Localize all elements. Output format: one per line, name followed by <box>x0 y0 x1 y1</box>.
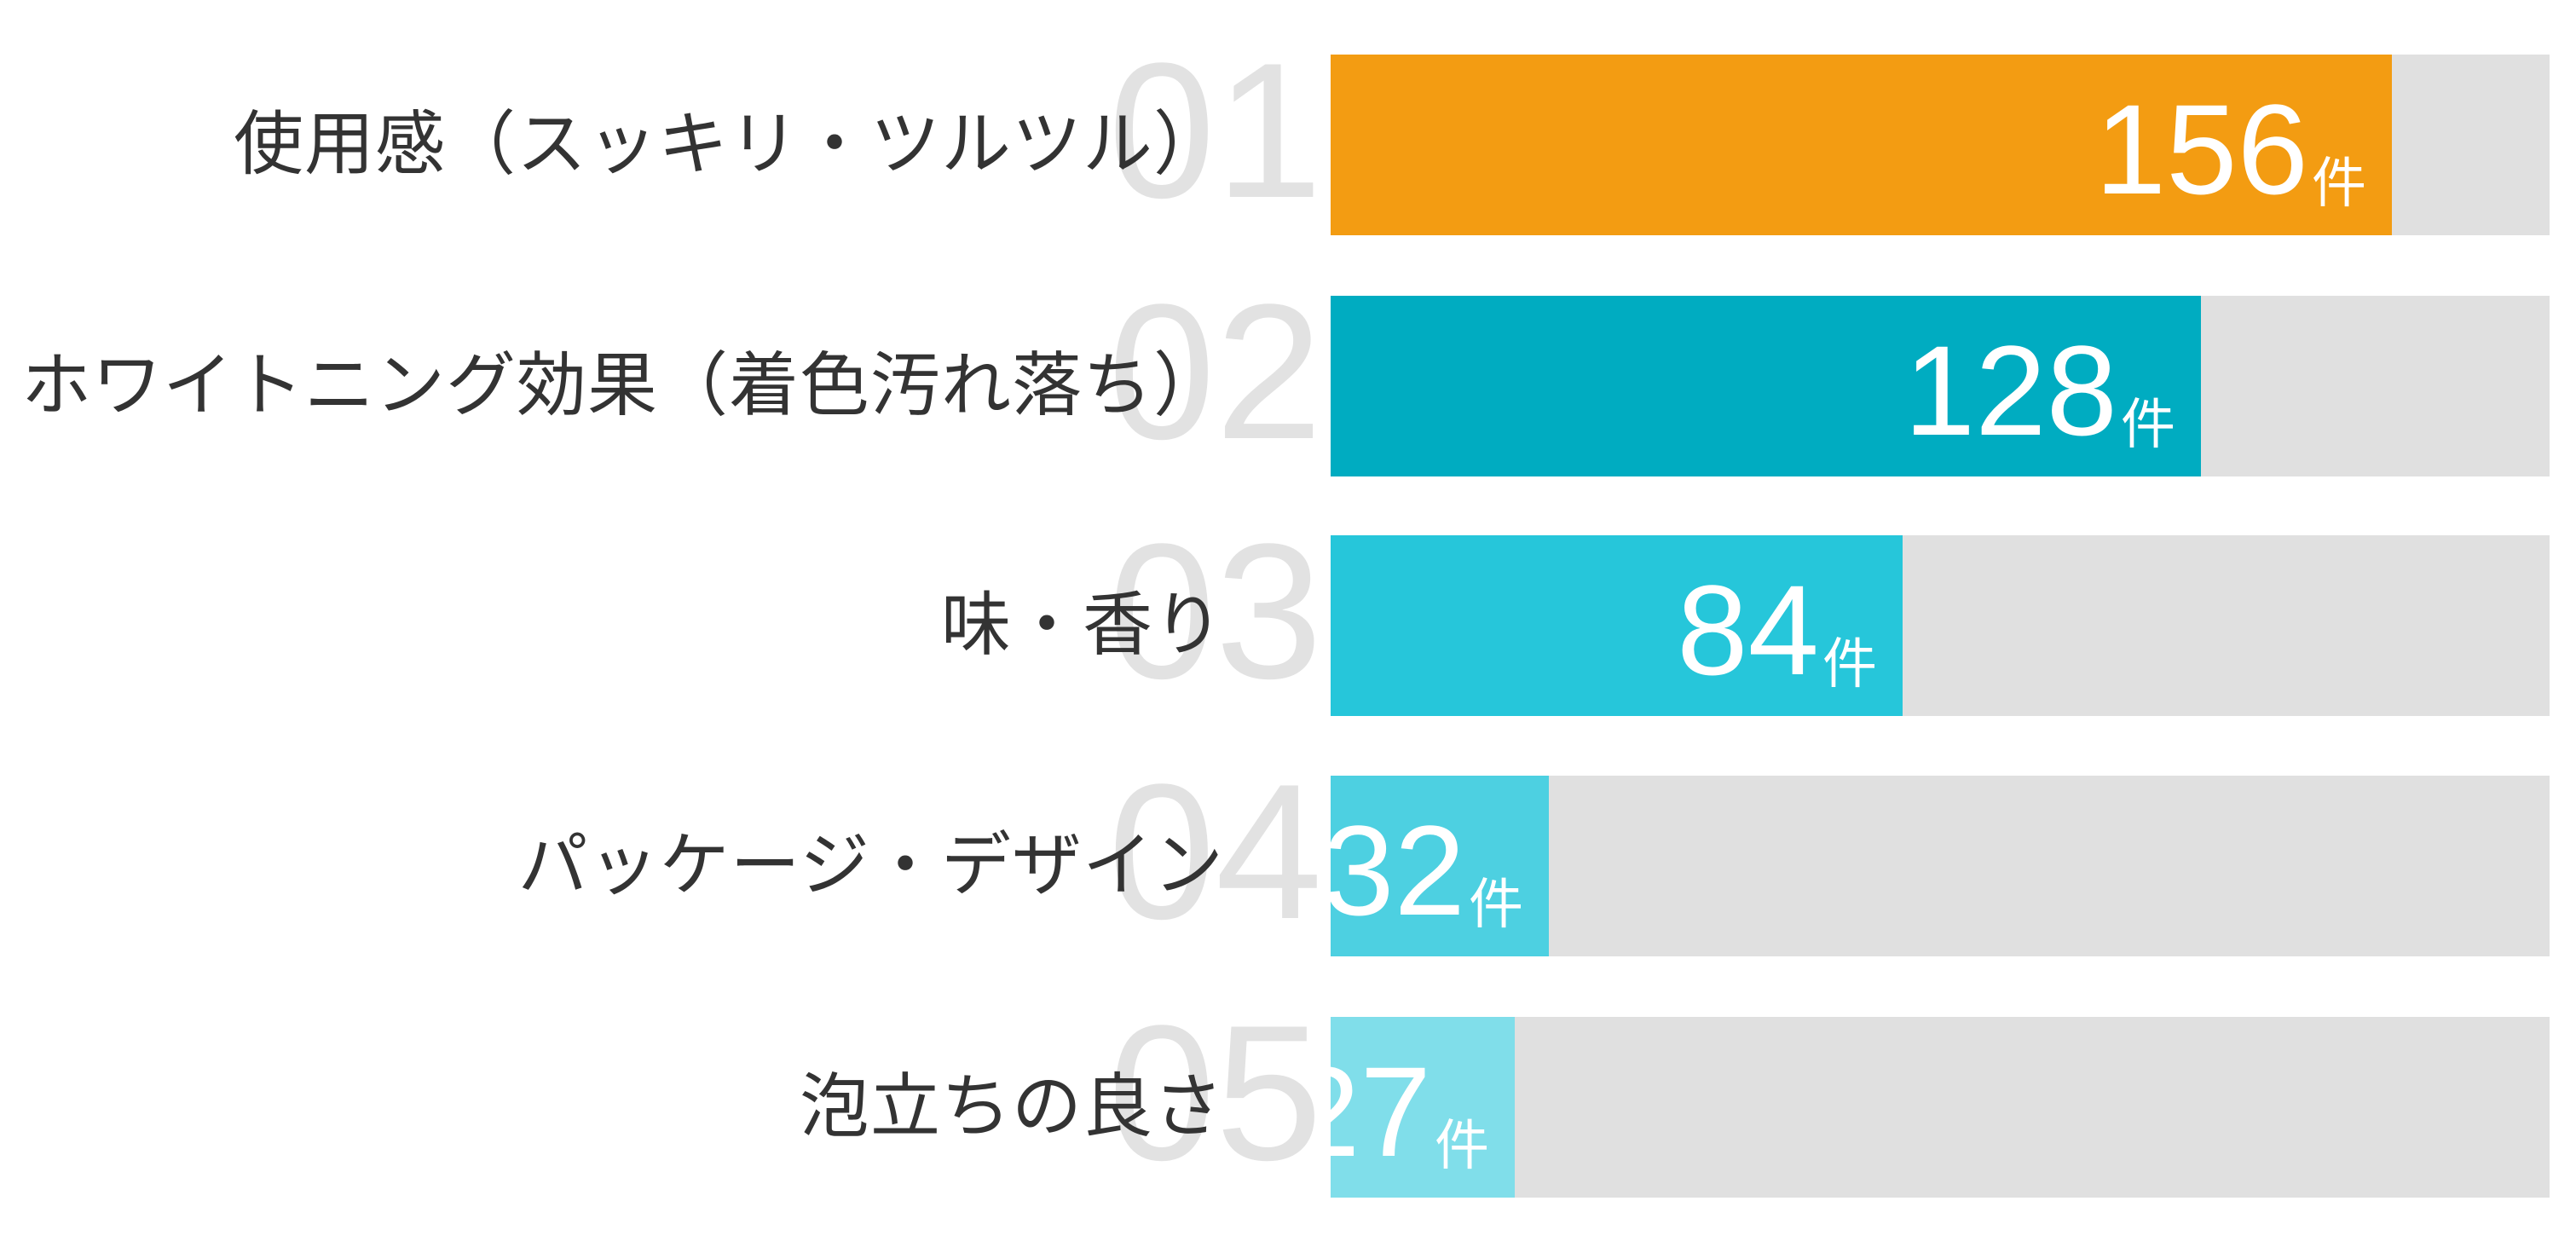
bar 2 <box>1331 296 2550 476</box>
bar 3 <box>1331 535 2550 716</box>
rank number 05: 05 <box>1108 984 1322 1200</box>
row 4: パッケージ <box>518 743 2550 959</box>
bar 2: 128件 <box>1904 319 2175 462</box>
label 5: 泡立ちの良さ <box>800 1068 1224 1146</box>
row 2: ホワイトニング <box>21 263 2550 479</box>
label 1: 使用感（スッキリ・ツルツル） <box>234 106 1224 183</box>
rank number 02: 02 <box>1108 263 1322 479</box>
bar 1: 156件 <box>2095 78 2366 221</box>
row 3: 味・香り <box>941 503 2550 719</box>
bar 1 <box>1331 55 2550 235</box>
rank number 03: 03 <box>1108 503 1322 719</box>
label 2: ホワイトニング効果（着色汚れ落ち） <box>21 347 1224 424</box>
row 5: 泡立ち <box>800 984 2550 1200</box>
bar 5 <box>1331 1017 2550 1198</box>
label 3: 味・香り <box>941 586 1224 664</box>
bar 3: 84件 <box>1677 558 1877 702</box>
rank number 04: 04 <box>1108 743 1322 959</box>
label 4: パッケージ・デザイン <box>518 827 1224 904</box>
rank number 01: 01 <box>1108 22 1322 238</box>
row 1: 使用感 <box>234 22 2550 238</box>
bar 4 <box>1331 776 2550 956</box>
